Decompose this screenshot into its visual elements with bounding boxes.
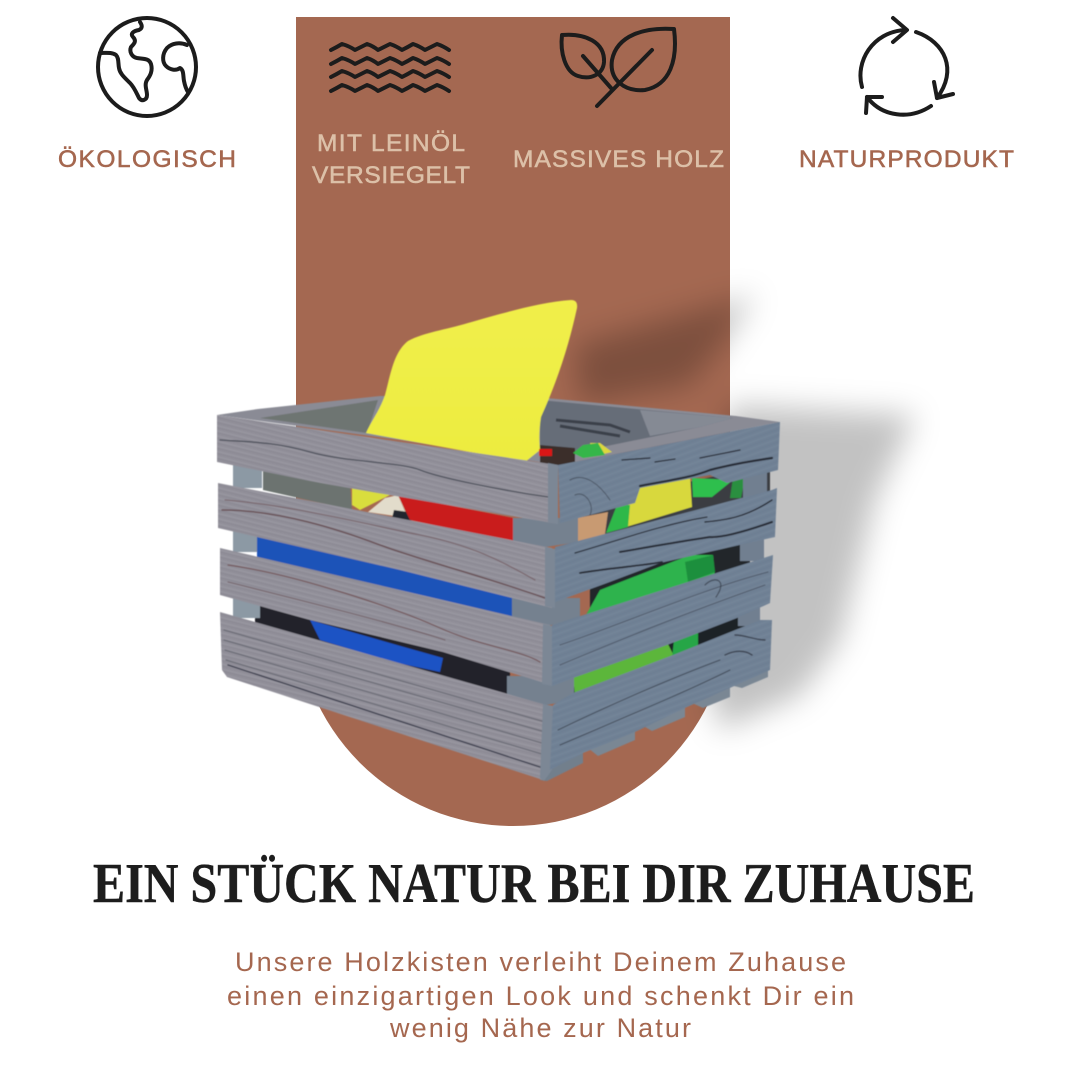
- crate right face wood grain: [558, 450, 772, 745]
- crate shadow: [575, 295, 915, 730]
- icon: recycle arrows: [860, 18, 953, 115]
- crate feet: [540, 668, 768, 781]
- icon: waves: [331, 44, 449, 91]
- crate back walls and rim: [217, 396, 780, 465]
- crate contents seen through gaps: [255, 443, 770, 705]
- title: EIN STÜCK NATUR BEI DIR ZUHAUSE: [93, 853, 975, 915]
- description text: Unsere Holzkisten verleiht Deinem Zuhause: [235, 947, 846, 977]
- photo: wooden crate with pillow: [217, 300, 780, 781]
- panel: brown arch background: [296, 17, 730, 826]
- pillow: [366, 300, 577, 462]
- label: Naturprodukt: NATURPRODUKT: [799, 146, 1014, 173]
- label: Mit Leinöl versiegelt: [312, 130, 470, 189]
- label: Mit Leinöl versiegelt: MIT LEINÖL: [317, 130, 465, 157]
- label: Ökologisch: ÖKOLOGISCH: [58, 146, 236, 173]
- label: Mit Leinöl versiegelt: VERSIEGELT: [312, 162, 470, 189]
- crate left face slats: [217, 415, 558, 780]
- description text: [227, 947, 854, 1043]
- crate left face wood grain: [220, 440, 548, 768]
- label: Massives Holz: MASSIVES HOLZ: [513, 146, 724, 173]
- icon: leaves: [562, 29, 675, 106]
- description text: einen einzigartigen Look und schenkt Dir ein: [227, 981, 854, 1011]
- crate right face slats: [550, 422, 780, 770]
- crate corner end-grain strips: [540, 463, 558, 781]
- crate corner posts: [233, 462, 767, 712]
- description text: wenig Nähe zur Natur: [389, 1013, 691, 1043]
- icon: globe: [98, 18, 196, 116]
